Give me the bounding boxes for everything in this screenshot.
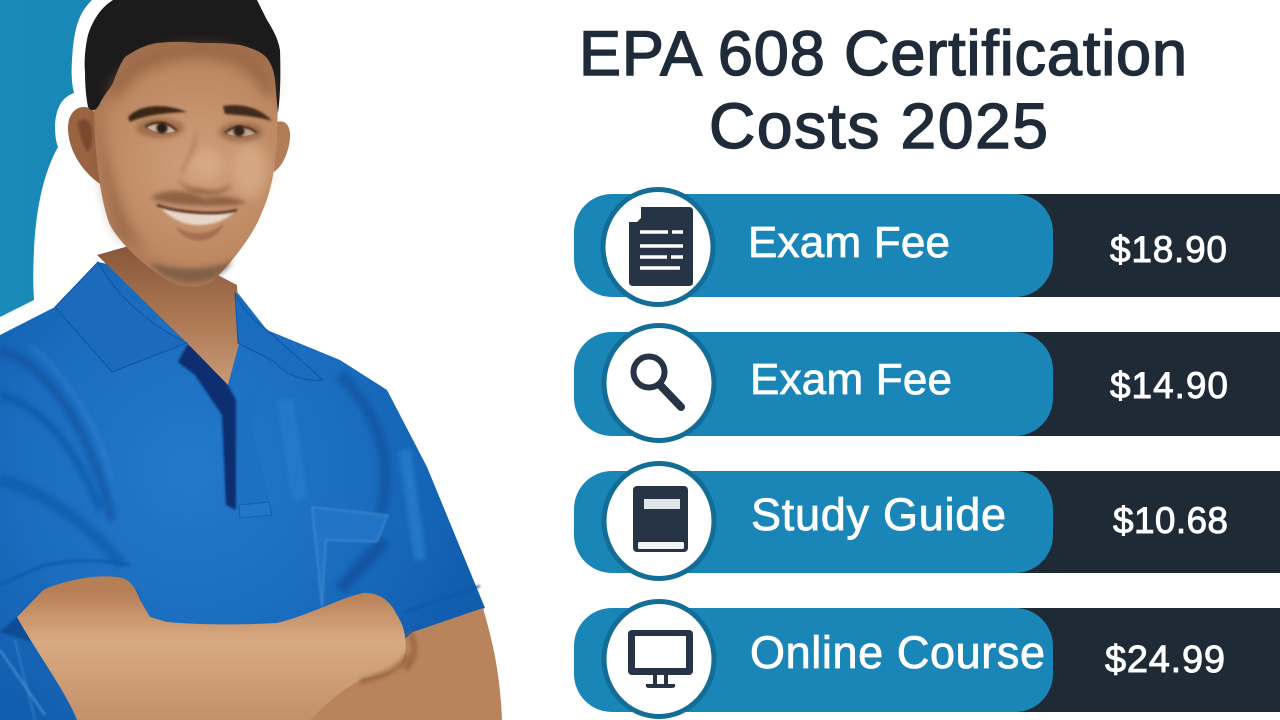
- right forearm: [300, 608, 502, 720]
- title: EPA 608 Certification: [579, 19, 1187, 89]
- illustration: smiling technician in blue polo: [0, 0, 502, 720]
- eyebrows: [128, 106, 187, 122]
- face side shading: [98, 110, 150, 255]
- right ear: [272, 121, 290, 172]
- hairline shade: [112, 50, 270, 95]
- icon: book: [604, 464, 714, 578]
- face: [94, 30, 278, 287]
- icon: computer monitor: [604, 602, 714, 716]
- hair: [85, 0, 280, 113]
- price band: [1000, 332, 1280, 436]
- chest pocket: [312, 507, 388, 607]
- facial features: [98, 50, 272, 282]
- neck: [97, 240, 240, 385]
- eye sockets: [136, 118, 184, 138]
- placket: [178, 345, 272, 518]
- chin stubble: [150, 260, 233, 282]
- label: Exam Fee: [748, 218, 950, 267]
- label bar: [574, 332, 1053, 436]
- left collar: [55, 262, 187, 372]
- moustache shadow: [150, 191, 247, 206]
- label: Study Guide: [751, 489, 1006, 540]
- price: $18.90: [1110, 229, 1227, 270]
- title: [579, 19, 1187, 162]
- price: $24.99: [1105, 639, 1225, 681]
- cheek highlight: [232, 142, 268, 198]
- left ear: [68, 107, 104, 184]
- icon: document: [603, 190, 713, 304]
- lower lip: [175, 223, 224, 241]
- shirt folds and seams: [0, 345, 420, 590]
- left crossed arm: [17, 576, 406, 720]
- shirt body: [0, 262, 502, 720]
- nose: [180, 125, 198, 178]
- icon: magnifying glass: [604, 326, 714, 440]
- label: Online Course: [750, 627, 1045, 678]
- eyes: [147, 124, 176, 133]
- arm creases: [360, 632, 414, 682]
- price band: [1000, 194, 1280, 297]
- row 3: study guide: [574, 464, 1280, 578]
- panel: blue backdrop behind person: [0, 0, 92, 317]
- mouth and teeth: [160, 207, 236, 225]
- label bar: [574, 194, 1053, 297]
- label bar: [574, 608, 1053, 712]
- row 2: exam fee: [574, 326, 1280, 440]
- price: $14.90: [1110, 365, 1228, 406]
- right collar: [235, 292, 323, 380]
- label bar: [574, 471, 1053, 573]
- price band: [1000, 608, 1280, 712]
- row 4: online course: [574, 602, 1280, 716]
- price band: [1000, 471, 1280, 573]
- price: $10.68: [1113, 500, 1228, 541]
- label: Exam Fee: [750, 355, 952, 404]
- sleeve hems: [0, 561, 480, 720]
- sleeve hem shadow: [0, 577, 138, 650]
- row 1: exam fee: [574, 190, 1280, 304]
- title: Costs 2025: [709, 90, 1048, 162]
